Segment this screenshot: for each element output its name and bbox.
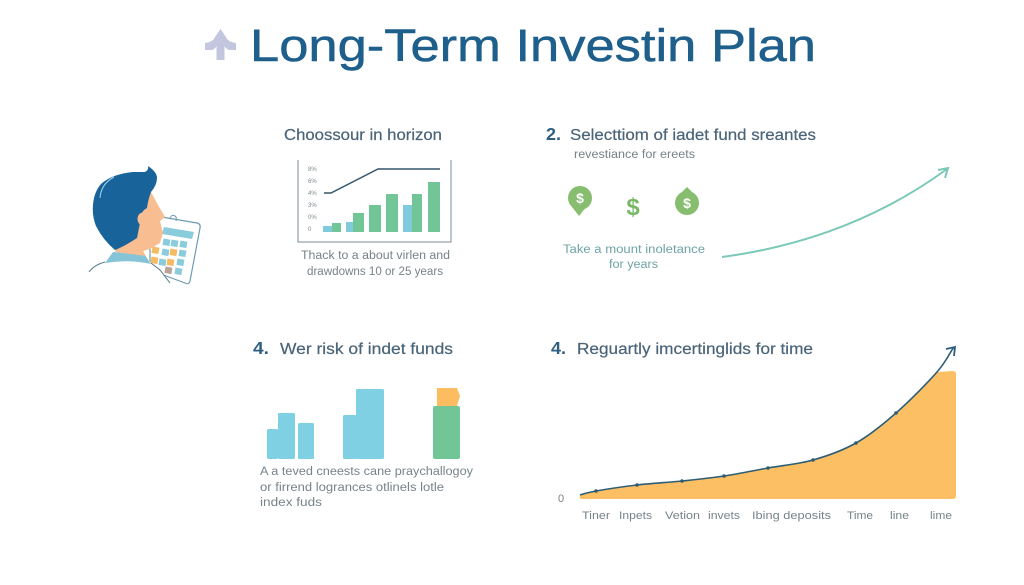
title	[205, 20, 816, 71]
bar group 3	[433, 388, 460, 459]
panel: selection	[546, 124, 948, 271]
axis labels	[558, 493, 952, 522]
panel: regular investing	[551, 338, 956, 522]
icon: dollar drop: $	[683, 195, 691, 211]
hair	[93, 166, 157, 250]
icon: dollar pin: $	[576, 190, 584, 206]
bar group 1	[267, 413, 314, 459]
axis labels: Tiner	[582, 510, 610, 522]
caption: index fuds	[260, 497, 322, 509]
arrow: growth	[722, 168, 948, 257]
axis labels: line	[890, 510, 909, 522]
axis labels: Time	[847, 510, 873, 522]
caption: for years	[609, 259, 658, 271]
bar group 2	[343, 389, 384, 459]
bar chart: 6%	[308, 179, 317, 185]
caption: Take a mount inoletance	[563, 244, 705, 256]
bar chart: 4%	[308, 191, 317, 197]
caption: or firrend logrances otlinels lotle	[260, 482, 444, 494]
bar chart: 0%	[308, 215, 317, 221]
caption: A a teved cneests cane praychallogoy	[260, 466, 473, 478]
heading	[551, 338, 813, 358]
caption	[301, 250, 450, 278]
illustration: person with calendar	[89, 166, 200, 292]
icon: dollar drop	[675, 187, 699, 215]
icon: dollar pin	[568, 186, 592, 216]
bar chart	[298, 160, 451, 242]
axis labels: Ibing deposits	[752, 510, 832, 522]
bar chart: 8%	[308, 167, 317, 173]
axis labels: lime	[930, 510, 952, 522]
calendar	[150, 215, 200, 284]
ear	[138, 212, 148, 226]
heading: 2.	[546, 124, 561, 144]
heading	[253, 338, 453, 358]
bar chart: 0	[308, 227, 312, 233]
heading: Reguartly imcertinglids for time	[577, 341, 813, 358]
caption: Thack to a about virlen and	[301, 250, 450, 262]
shirt collar	[105, 252, 151, 264]
heading: Selecttiom of iadet fund sreantes	[570, 127, 816, 144]
axis labels: Inpets	[619, 510, 653, 522]
icon: dollar sign: $	[626, 194, 640, 221]
icon: title arrow	[205, 29, 236, 60]
heading: 4.	[551, 338, 566, 358]
caption	[563, 244, 705, 271]
axis labels: Vetion	[665, 510, 700, 522]
bar chart: 3%	[308, 203, 317, 209]
heading: Wer risk of indet funds	[280, 341, 453, 358]
title text: Long-Term Investin Plan	[250, 20, 816, 71]
axis labels: invets	[708, 510, 741, 522]
panel: horizon	[284, 127, 451, 278]
axis labels: 0	[558, 493, 564, 505]
caption: drawdowns 10 or 25 years	[307, 266, 443, 278]
area chart	[580, 347, 956, 499]
shoulders	[89, 252, 170, 292]
subheading: revestiance for ereets	[574, 149, 695, 161]
neck and face	[115, 192, 165, 256]
panel: risk	[253, 338, 473, 509]
heading: 4.	[253, 338, 269, 358]
caption	[260, 466, 473, 509]
heading: Choossour in horizon	[284, 127, 442, 144]
hair highlight	[100, 177, 114, 198]
